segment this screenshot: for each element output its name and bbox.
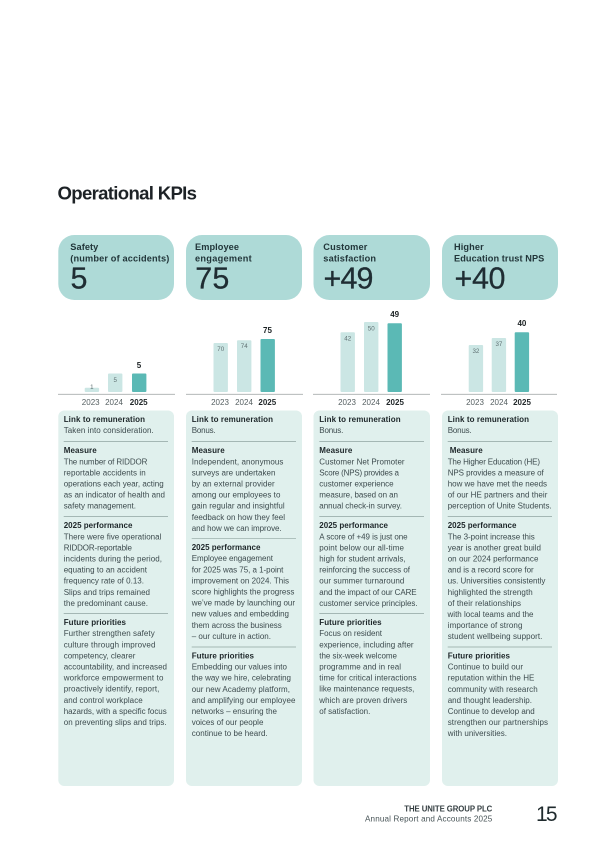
bar chart: employee engagement [186,326,303,407]
panel: safety details: There were five operational [64,532,162,541]
panel: safety details: Taken into consideration. [64,426,154,435]
panel: employee engagement details: for 2025 was 75, a 1-point [192,565,284,574]
panel: employee engagement headline card: Employee [195,242,239,252]
panel: employee engagement headline card [186,235,302,300]
panel: employee engagement details: Embedding our values into [192,663,288,672]
bar chart: higher education trust: 37 [495,341,503,348]
panel: employee engagement details: Measure [192,446,225,455]
panel: employee engagement details: Link to remuneration [192,415,273,424]
panel: safety details: safety management. [64,502,136,511]
panel: customer satisfaction details: 2025 performance [319,521,389,530]
footer: report name [365,804,493,824]
panel: higher education trust details: importance of strong [448,621,522,630]
panel: customer satisfaction details: Score (NPS) provides a [319,468,400,477]
panel: customer satisfaction details: like maintenance requests, [319,685,414,694]
panel: higher education trust details: how we have met the needs [448,480,547,488]
bar chart: safety: 5 [113,377,117,384]
panel: employee engagement details: among our employees to [192,491,281,500]
panel: higher education trust headline card [442,235,558,300]
footer: report name: Annual Report and Accounts 2025 [365,815,493,824]
panel: customer satisfaction details: which are proven drivers [318,696,407,705]
headline value: safety: 5 [70,262,87,296]
panel: safety details: The number of RIDDOR [64,457,148,466]
panel: safety details: and control workplace [64,696,143,705]
panel: employee engagement details: surveys are undertaken [192,468,275,477]
panel: employee engagement details: and amplifying our employee [192,696,296,705]
panel: customer satisfaction details: programme and in real [319,662,401,672]
panel: safety details: Link to remuneration [64,415,145,424]
panel: safety details: Slips and trips remained [64,588,150,597]
bar chart: higher education trust: 32 [472,348,480,355]
panel: safety details: Measure [64,446,97,455]
panel: higher education trust details: with local teams and the [446,610,534,619]
panel: safety details: incidents during the period, [64,554,162,564]
panel: safety details: workforce empowerment to [63,674,164,683]
bar chart: higher education trust: 2024 [490,398,508,407]
bar chart: safety: 2024 [105,398,123,407]
panel: customer satisfaction details: experience, including after [319,640,414,649]
panel: customer satisfaction headline card: Customer [323,242,368,252]
bar chart: customer satisfaction: 50 [368,326,375,332]
panel: employee engagement details: new values and embedding [192,610,289,619]
bar chart: safety: 1 [90,384,94,391]
bar chart: customer satisfaction: 2025 [386,398,404,407]
bar chart: higher education trust: 2025 [513,398,531,407]
panel: customer satisfaction details: point below our all-time [319,543,405,552]
panel: safety details: equating to an accident [64,566,148,575]
panel: safety details: accountability, and increased [64,662,167,672]
panel: employee engagement details: we’ve made by launching our [191,599,295,608]
panel: higher education trust details: NPS provides a measure of [448,468,544,477]
panel: customer satisfaction details: and the impact of our CARE [319,588,417,597]
panel: customer satisfaction headline card: satisfaction [323,254,376,264]
panel: higher education trust details: on our 2024 performance [448,554,539,564]
panel: higher education trust details: and thought leadership. [448,696,532,705]
panel: higher education trust details: Bonus. [448,426,472,435]
panel: customer satisfaction details: reinforcing the success of [319,566,411,575]
panel: safety headline card [58,235,174,300]
panel: customer satisfaction details: our summer turnaround [319,577,404,586]
panel: employee engagement details: Future priorities [192,652,255,660]
panel: employee engagement details: Independent, anonymous [192,457,283,466]
bar chart: employee engagement: 2025 [258,398,277,407]
panel: higher education trust headline card: Higher [454,242,484,252]
panel: safety details: Further strengthen safety [64,629,155,638]
panel: employee engagement details: feedback on how they feel [192,513,285,522]
bar chart: employee engagement: 70 [217,346,225,353]
panel: employee engagement details: 2025 performance [192,543,261,552]
panel: higher education trust details: and is a record score for [448,566,534,575]
panel: customer satisfaction details [314,410,430,786]
bar chart: customer satisfaction: 42 [344,336,352,342]
page number: 15 [536,803,558,826]
panel: higher education trust details: highlighted the strength [448,588,533,597]
panel: higher education trust details: Continue to build our [448,663,523,672]
panel: customer satisfaction details: high for student arrivals, [319,554,406,564]
panel: customer satisfaction details: customer service principles. [319,599,418,608]
bar chart: higher education trust [441,319,557,407]
panel: higher education trust details: of our HE partners and their [448,491,548,500]
panel: customer satisfaction details: Link to remuneration [319,415,401,424]
panel: higher education trust details: of their relationships [448,599,521,608]
bar chart: customer satisfaction: 49 [390,310,400,319]
panel: employee engagement details: – our culture in action. [192,632,271,641]
bar chart: safety [58,361,175,407]
bar chart: safety: 2025 [130,398,148,407]
panel: higher education trust details: The 3-point increase this [448,532,535,541]
panel: higher education trust details: reputation within the HE [448,674,534,683]
headline value: employee engagement: 75 [195,262,229,296]
panel: safety details: competency, clearer [64,651,136,660]
bar chart: higher education trust: 40 [517,319,527,328]
panel: safety headline card: Safety [70,242,99,252]
panel: employee engagement details: improvement on 2024. This [192,576,289,585]
panel: safety details: on preventing slips and trips. [64,718,167,727]
panel: customer satisfaction details: time for critical interactions [319,674,417,683]
panel: higher education trust details [442,410,558,786]
panel: higher education trust details: Measure [450,446,483,455]
panel: safety details: frequency rate of 0.13. [64,577,144,586]
panel: safety details: reportable accidents in [64,468,146,477]
panel: customer satisfaction details: annual check-in survey. [319,502,402,511]
bar chart: customer satisfaction: 2023 [338,398,356,407]
panel: safety details: the predominant cause. [64,599,148,608]
panel: employee engagement details: voices of our people [192,718,264,727]
panel: higher education trust details: year is another great build [448,543,541,552]
panel: safety details: hazards, with a specific focus [64,707,167,716]
bar chart: customer satisfaction [313,310,430,407]
panel: employee engagement details: score highlights the progress [192,588,294,596]
panel: employee engagement details: gain regular and insightful [192,502,285,511]
bar chart: safety: 2023 [82,398,100,407]
bar chart: employee engagement: 2024 [235,398,253,407]
panel: employee engagement details: networks – ensuring the [192,707,278,716]
panel: higher education trust details: us. Universities consistently [448,577,545,586]
panel: employee engagement details [186,410,302,786]
panel: customer satisfaction details: Future priorities [319,618,382,627]
panel: customer satisfaction headline card [314,235,430,300]
panel: customer satisfaction details: Customer Net Promoter [319,457,405,466]
panel: safety details: proactively identify, report, [64,685,159,694]
panel: employee engagement details: and how we can improve. [192,524,282,533]
panel: customer satisfaction details: measure, based on an [319,491,398,500]
panel: customer satisfaction details: A score of +49 is just one [319,532,408,541]
panel: higher education trust details: strengthen our partnerships [448,718,548,727]
panel: safety details: culture through improved [64,640,155,649]
panel: higher education trust details: Continue to develop and [448,707,535,716]
panel: higher education trust details: Link to remuneration [448,415,529,424]
panel: safety details: 2025 performance [64,521,133,530]
panel: employee engagement details: by an external provider [192,480,275,488]
panel: higher education trust details: with universities. [447,729,507,738]
panel: safety details: Future priorities [64,618,127,627]
panel: safety details [58,410,174,786]
panel: employee engagement details: Bonus. [192,426,216,435]
panel: higher education trust details: Future priorities [448,652,511,660]
panel: customer satisfaction details: customer experience [319,480,394,488]
panel: higher education trust details: student wellbeing support. [448,632,542,641]
panel: customer satisfaction details: Bonus. [319,426,343,435]
panel: employee engagement details: Employee engagement [192,554,274,563]
bar chart: safety: 5 [137,361,142,370]
panel: customer satisfaction details: Measure [319,446,353,455]
panel: higher education trust details: The Higher Education (HE) [448,457,540,466]
panel: employee engagement details: continue to be heard. [192,729,268,738]
headline value: higher education trust: +40 [454,262,506,296]
panel: safety details: operations each year, acting [64,480,164,488]
headline value: customer satisfaction: +49 [324,262,374,296]
panel: safety details: as an indicator of health and [64,491,165,500]
footer: report name: THE UNITE GROUP PLC [404,804,493,814]
bar chart: employee engagement: 2023 [211,398,229,407]
bar chart: employee engagement: 74 [241,343,248,350]
panel: higher education trust details: community with research [448,685,538,694]
panel: higher education trust details: perception of Unite Students. [448,502,552,511]
panel: safety details: RIDDOR-reportable [64,543,133,552]
panel: safety headline card: (number of accidents) [70,254,169,264]
panel: employee engagement details: our new Academy platform, [192,685,290,694]
panel: higher education trust details: 2025 performance [448,521,517,530]
panel: employee engagement headline card: engagement [195,254,252,264]
panel: customer satisfaction details: Focus on resident [319,629,383,638]
panel: higher education trust headline card: Education trust NPS [454,254,544,264]
bar chart: customer satisfaction: 2024 [362,398,380,407]
title: Operational KPIs [58,182,197,204]
panel: customer satisfaction details: the six-week welcome [319,651,398,660]
bar chart: employee engagement: 75 [263,326,272,335]
bar chart: higher education trust: 2023 [466,398,484,407]
panel: employee engagement details: them across the business [192,621,282,630]
panel: customer satisfaction details: of satisfaction. [319,707,370,716]
panel: employee engagement details: the way we hire, celebrating [192,674,291,683]
